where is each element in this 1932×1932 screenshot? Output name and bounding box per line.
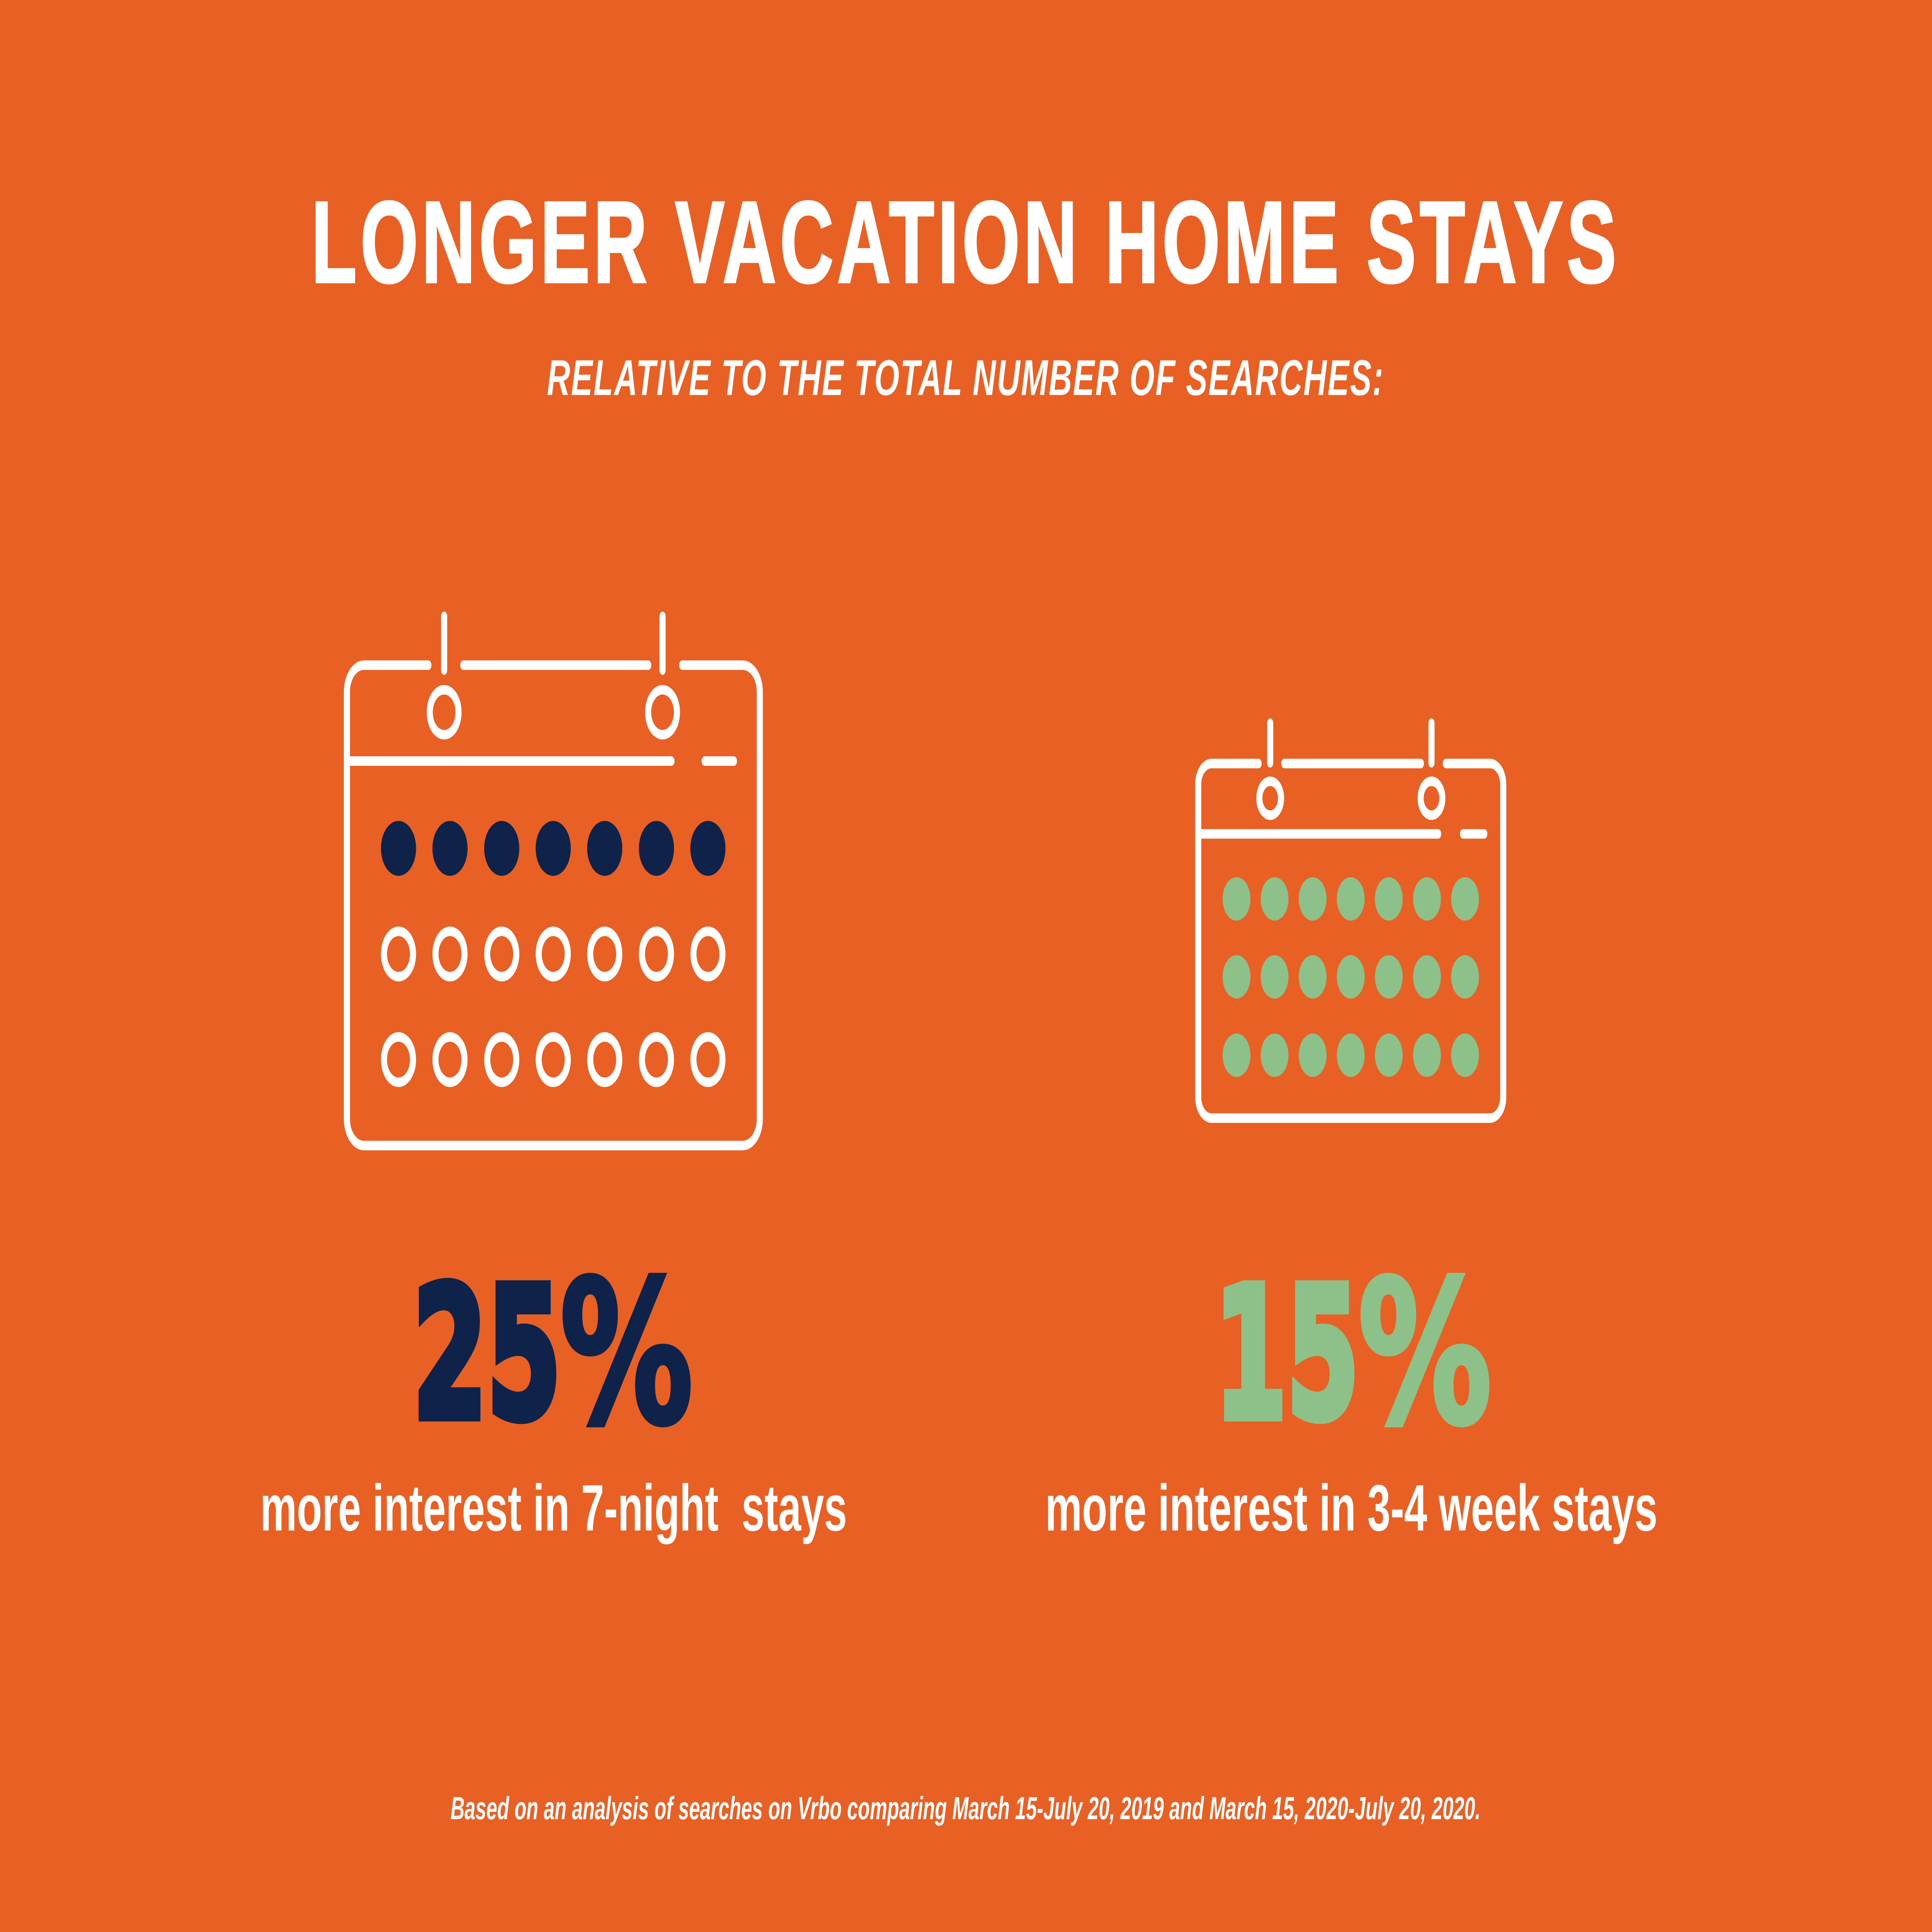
subtitle: RELATIVE TO THE TOTAL NUMBER OF SEARCHES: [547, 350, 1383, 406]
navy filled days [381, 821, 726, 876]
title: LONGER VACATION HOME STAYS [311, 178, 1616, 307]
icon: small calendar [1198, 723, 1503, 1118]
stat: 15%: 15 [1214, 1249, 1359, 1460]
empty days [384, 931, 723, 1082]
stat: 25%: % [560, 1239, 693, 1469]
panel: 7-night stays [260, 616, 847, 1545]
panel: 3-4 week stays [1045, 723, 1658, 1545]
green filled days [1223, 877, 1479, 1077]
calendar frame [347, 616, 760, 1146]
stat: 15%: % [1358, 1239, 1492, 1469]
caption: 3-4 week stays: more interest in 3-4 week stays [1045, 1471, 1658, 1545]
footnote: Based on an analysis of searches on Vrbo comparing March 15-July 20, 2019 and March 15, 2020-July 20, 2020. [451, 1790, 1481, 1826]
calendar frame [1198, 723, 1503, 1118]
icon: large calendar [347, 616, 760, 1146]
stat: 15% [1214, 1239, 1492, 1469]
caption: 7-night stays: more interest in 7-night stays [260, 1471, 847, 1545]
stat: 25% [413, 1239, 693, 1469]
stat: 25%: 25 [413, 1249, 561, 1460]
